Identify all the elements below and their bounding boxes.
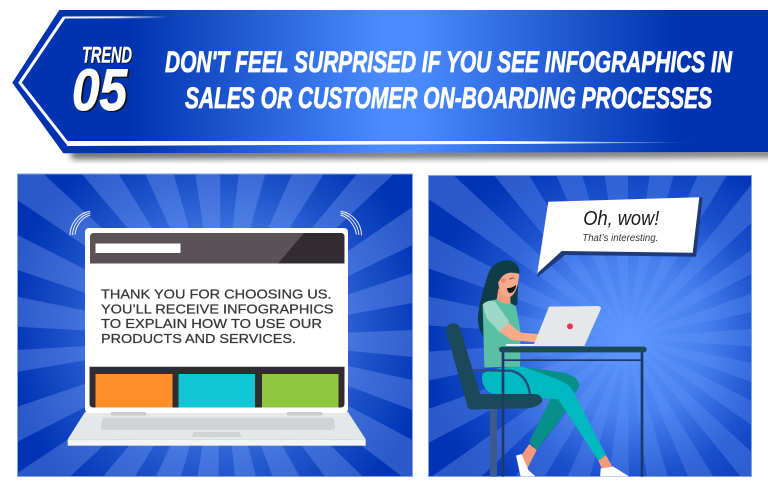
title (165, 46, 733, 115)
laptop base (68, 412, 366, 446)
near leg (482, 367, 628, 478)
screen message: TO EXPLAIN HOW TO USE OUR (101, 316, 322, 331)
far leg (516, 398, 566, 476)
trend label: 05 (72, 58, 128, 123)
panel: woman background with sunburst (428, 174, 752, 476)
shirt (483, 299, 538, 367)
screen message: YOU’LL RECEIVE INFOGRAPHICS (101, 301, 334, 316)
bubble text (582, 208, 660, 244)
speech bubble (537, 197, 703, 277)
woman at desk (446, 260, 647, 478)
armrest (473, 370, 530, 394)
header banner (12, 10, 768, 159)
laptop (68, 228, 366, 446)
laptop screen (85, 228, 348, 413)
trend label: TREND (83, 44, 133, 68)
sunburst rays behind laptop (18, 174, 412, 476)
bubble text: That’s interesting. (582, 232, 658, 244)
neck (497, 288, 511, 306)
icon: vibration arcs (70, 211, 362, 235)
chair (446, 323, 542, 478)
face (498, 272, 520, 298)
seat (467, 394, 542, 409)
trend label: TREND (82, 42, 132, 68)
screen message (101, 286, 334, 346)
desk (499, 347, 647, 478)
colored tiles (90, 367, 344, 408)
trend label: 05 (74, 59, 129, 124)
hinges (111, 412, 322, 416)
browser top bar (90, 233, 344, 264)
panel: laptop background (17, 174, 413, 476)
hair (478, 260, 519, 338)
screen message: PRODUCTS AND SERVICES. (101, 331, 296, 346)
screen message: THANK YOU FOR CHOOSING US. (101, 286, 332, 301)
bubble text: Oh, wow! (583, 208, 660, 230)
desk laptop (506, 306, 601, 346)
